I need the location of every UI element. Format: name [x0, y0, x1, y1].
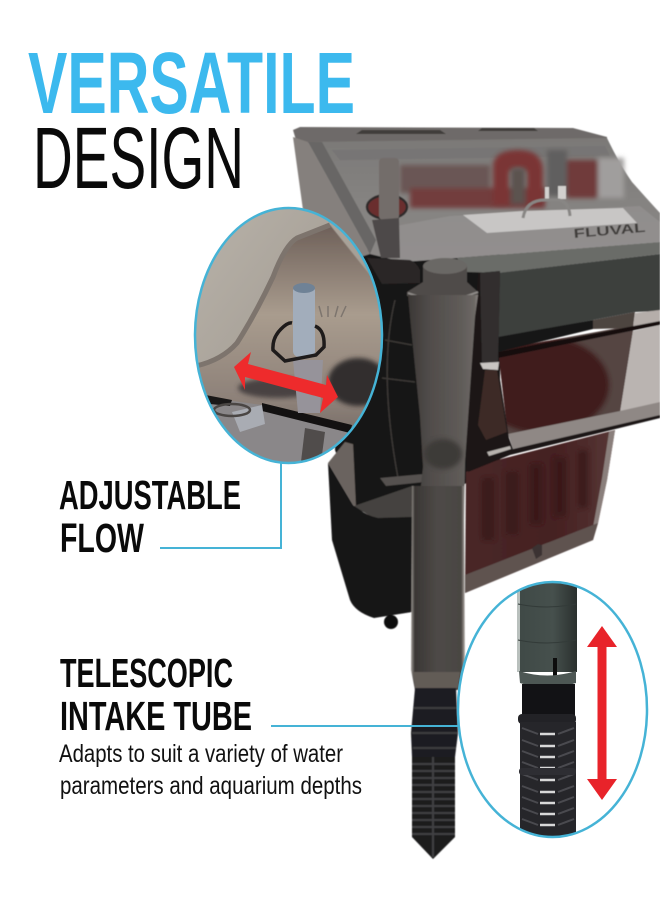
lower window red blob [498, 337, 611, 432]
lid shell [200, 224, 380, 428]
lower tube [411, 486, 465, 690]
description text: Adapts to suit a variety of water [59, 740, 343, 768]
pin top [293, 283, 315, 293]
tube rings [412, 708, 458, 748]
right flap [466, 271, 513, 472]
dark reflection [328, 358, 388, 406]
window lower rim [508, 402, 660, 449]
strainer ribs [522, 728, 574, 825]
lid upper band [332, 146, 610, 160]
tube collar [519, 671, 576, 684]
red arch [493, 150, 543, 205]
lid rim [196, 225, 330, 366]
dark backing body [335, 250, 500, 525]
adjuster ring [367, 195, 407, 219]
front dark panel [498, 254, 660, 338]
black lower tube [411, 688, 458, 757]
lower lid band [385, 206, 660, 262]
label: adjustable flow: FLOW [60, 515, 144, 561]
tube cap top [423, 258, 467, 274]
dark gap [498, 320, 593, 352]
adjuster pin [379, 158, 399, 220]
grey behind foot [354, 486, 412, 520]
window divider line [498, 321, 660, 358]
zoom circle: telescopic tube [458, 580, 647, 838]
lid glass [308, 138, 660, 262]
dark housing wing [353, 283, 424, 507]
box side stripes [482, 450, 588, 540]
strainer slots [540, 734, 555, 825]
tube notch [553, 658, 557, 676]
description text: parameters and aquarium depths [60, 772, 362, 800]
callout line: telescopic tube [271, 725, 459, 727]
strainer ribs [412, 757, 455, 857]
flap bottom highlight [487, 446, 511, 456]
aquarium filter photo [293, 127, 660, 859]
title line: design: DESIGN [33, 110, 244, 207]
strainer mid ring [519, 768, 576, 775]
red double arrow [234, 352, 338, 413]
front grey strip [457, 242, 660, 273]
circle outline [195, 208, 382, 463]
tube cap [407, 266, 478, 296]
wing pale foot [380, 474, 424, 486]
motor foot [384, 615, 398, 629]
flap maroon pane [478, 370, 507, 440]
label: adjustable flow: ADJUSTABLE [59, 472, 241, 518]
label: telescopic intake tube: INTAKE TUBE [60, 693, 252, 739]
title line: versatile: VERSATILE [28, 35, 355, 132]
intake strainer [412, 757, 455, 859]
lid top slots [356, 128, 538, 134]
black ledge band [262, 403, 352, 433]
pin shaft [293, 360, 323, 413]
red vertical double arrow [587, 626, 617, 800]
flap top face [480, 271, 500, 366]
right light gap [633, 310, 660, 328]
label: telescopic intake tube [60, 650, 252, 739]
right light window [620, 325, 660, 413]
tube dark blob [424, 439, 462, 469]
wing ribs [382, 300, 415, 478]
zoom circle: adjustable flow [190, 208, 390, 480]
tube collar [413, 672, 460, 688]
circle photo content [517, 580, 577, 838]
black inner tube [522, 684, 575, 716]
black motor [328, 463, 412, 618]
label: telescopic intake tube: TELESCOPIC [60, 650, 233, 696]
circle photo content [198, 222, 380, 462]
lid interior white pad [463, 208, 637, 233]
lid top surface [293, 127, 607, 143]
circle outline [458, 582, 647, 837]
clear corner [232, 405, 265, 432]
box bottom rim [465, 523, 598, 593]
label: adjustable flow [59, 472, 241, 561]
lower shadows [301, 428, 325, 460]
upper tube [408, 295, 478, 520]
tube bracket [367, 258, 420, 284]
adjuster pin shaft [372, 218, 400, 258]
box clip [532, 544, 542, 559]
maroon media box [465, 430, 615, 593]
lid handle [523, 200, 570, 218]
tube cap highlight [408, 292, 478, 299]
lid left side [293, 137, 370, 262]
arch centre [511, 168, 525, 204]
pin [293, 285, 315, 357]
scale ticks [319, 306, 346, 317]
strainer body [520, 722, 576, 838]
box right edge [593, 430, 615, 527]
flap highlight [480, 362, 499, 370]
lower window [498, 325, 634, 436]
description text [59, 740, 362, 800]
interior [400, 150, 624, 208]
white chips [545, 186, 566, 199]
window bottom frame [468, 415, 660, 472]
brown side wall [328, 442, 356, 507]
glass rim [308, 142, 376, 254]
strainer ring [518, 714, 576, 724]
adjuster ring [273, 323, 324, 361]
upper tube sleeve [517, 580, 577, 672]
brand emboss: FLUVAL [573, 220, 646, 241]
callout line: adjustable flow [160, 463, 281, 548]
title [28, 35, 355, 207]
lower ledge [211, 401, 348, 462]
